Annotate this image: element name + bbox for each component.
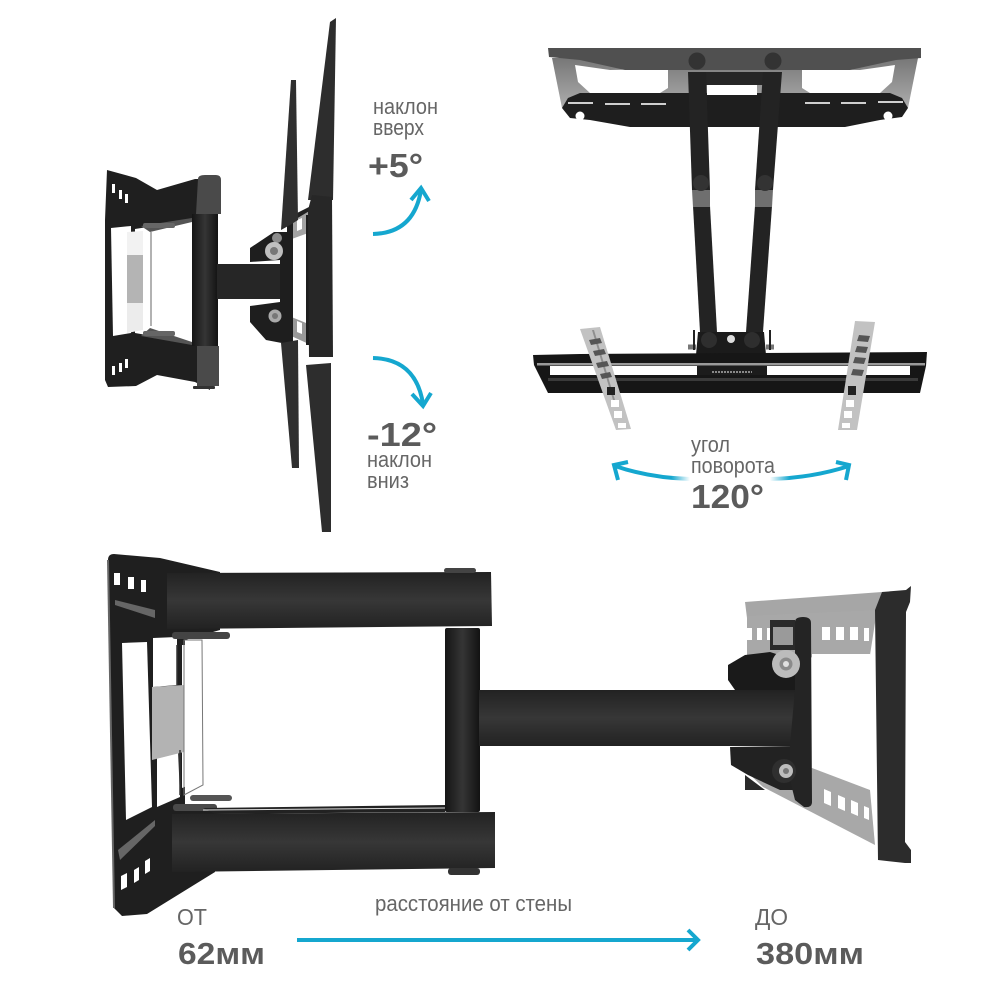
large front view of mount [108, 554, 911, 916]
vertical column [192, 214, 218, 346]
value: -12 degrees: -12° [367, 416, 437, 453]
swivel block [728, 620, 797, 790]
large wall plate [108, 554, 445, 916]
wall plate side view [105, 170, 210, 390]
vertical column [445, 628, 480, 812]
left silver bracket [580, 327, 631, 430]
value: 62 mm: 62мм [178, 936, 265, 971]
arm gloss joints [692, 190, 773, 207]
top view of mount [533, 48, 927, 430]
lower mount base [688, 330, 774, 355]
tilt up label [368, 94, 438, 184]
tilt down label [367, 416, 437, 493]
arrow: rotate left [614, 462, 690, 480]
max distance label [755, 904, 864, 971]
swing arms [688, 72, 782, 332]
front panel plate [308, 195, 333, 357]
horizontal arm [217, 264, 280, 299]
horizontal arm [479, 690, 795, 746]
upper bolt [772, 650, 800, 678]
tv bracket frame [745, 592, 882, 845]
tilt down label: вниз [367, 468, 409, 493]
value: 120 degrees: 120° [691, 478, 764, 515]
text: ugol povorota: угол [691, 432, 730, 457]
top arm knob [444, 568, 476, 573]
rotation label [691, 432, 776, 515]
arrow: distance from wall [297, 930, 698, 950]
text: naklon vverkh: наклон [373, 94, 438, 119]
tv bracket outer upright [875, 586, 911, 863]
rotation label: поворота [691, 453, 776, 478]
distance caption: расстояние от стены [375, 891, 572, 916]
top arm [167, 572, 492, 629]
bottom arm [172, 812, 495, 872]
tilt up label: вверх [373, 115, 424, 140]
center upright [790, 617, 812, 807]
lower bolt [772, 759, 796, 783]
rear panel upper blade [281, 80, 298, 230]
value: 380 mm: 380мм [756, 936, 864, 971]
text: ot: ОТ [177, 904, 207, 930]
front panel lower blade [306, 363, 331, 532]
bottom arm knob [448, 868, 480, 875]
front panel upper blade [308, 18, 336, 200]
top arm cap [196, 175, 221, 214]
text: naklon vniz: наклон [367, 447, 432, 472]
right silver bracket [838, 321, 875, 430]
rear panel lower blade [281, 340, 299, 468]
value: +5 degrees: +5° [368, 147, 423, 184]
wall plate top view [548, 48, 921, 127]
text: do: ДО [755, 904, 788, 930]
arrow: tilt up [373, 188, 429, 234]
pivot caps [688, 52, 782, 191]
side view of mount [105, 18, 336, 532]
tv rail [533, 352, 927, 393]
min distance label [177, 904, 265, 971]
tilt bracket rails [287, 206, 311, 346]
bottom arm cap [197, 346, 219, 386]
arrow: rotate right [770, 462, 849, 480]
arrow: tilt down [373, 358, 431, 406]
swivel joint [250, 232, 287, 344]
